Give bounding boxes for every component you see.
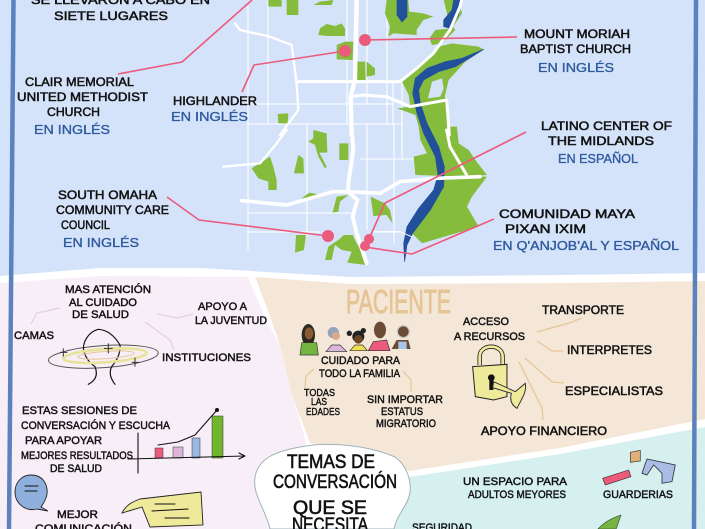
label: Highlander: EN INGLÉS [171, 109, 248, 124]
label: Clair Memorial [17, 75, 149, 137]
text: cuidado familia [304, 355, 443, 430]
vertical border: left [9, 0, 14, 529]
map: parks west and center [268, 0, 433, 123]
pointer: Latino Center [364, 132, 526, 244]
icon: family [300, 322, 411, 355]
callout: siete lugares: SIETE LUGARES [54, 9, 168, 23]
pointer: Highlander [242, 45, 351, 92]
map: parks south [252, 130, 393, 265]
labels: recursos: APOYO FINANCIERO [481, 424, 607, 438]
labels: galaxy topics [14, 283, 267, 364]
label: South Omaha: EN INGLÉS [63, 235, 139, 250]
labels: galaxy topics: CAMAS [14, 330, 54, 342]
label: Highlander: HIGHLANDER [173, 94, 257, 108]
label: Comunidad Maya: EN Q'ANJOB'AL Y ESPAÑOL [493, 239, 679, 253]
pointers: galaxy topics [31, 308, 193, 350]
icon: blue speech bubble [15, 475, 48, 511]
bubble: temas de conversación: QUE SE [293, 498, 367, 519]
label: Latino Center [541, 119, 672, 166]
labels: recursos: A RECURSOS [454, 331, 525, 343]
text: cuidado familia: ESTATUS [381, 406, 423, 418]
icon: head with galaxy [48, 329, 159, 384]
text: cuidado familia: SIN IMPORTAR [367, 394, 443, 406]
text: espacio adultos mayores [463, 476, 568, 501]
text: sesiones de conversación: DE SALUD [50, 463, 102, 475]
label: Mount Moriah: MOUNT MORIAH [524, 27, 630, 41]
pointers: recursos [519, 318, 582, 420]
text: cuidado familia: TODO LA FAMILIA [319, 368, 401, 380]
icon: yellow speech bubble [122, 492, 203, 527]
labels: recursos [454, 303, 663, 438]
labels: galaxy topics: INSTITUCIONES [162, 352, 251, 364]
panel: community voices [0, 276, 306, 529]
label: Latino Center: EN ESPAÑOL [558, 152, 638, 166]
label: Comunidad Maya: COMUNIDAD MAYA [499, 207, 635, 221]
icon: lock and key [473, 347, 526, 408]
label: Mount Moriah [520, 27, 631, 75]
icon: girl [347, 328, 367, 351]
label: Comunidad Maya: PIXAN IXIM [505, 222, 586, 236]
text: cuidado familia: CUIDADO PARA [321, 355, 401, 367]
icon: toy blocks [603, 450, 675, 485]
label: Mount Moriah: EN INGLÉS [538, 60, 614, 75]
text: espacio adultos mayores: ADULTOS MEYORES [468, 489, 566, 501]
label: South Omaha: COUNCIL [61, 218, 110, 232]
labels: recursos: TRANSPORTE [542, 303, 624, 317]
text: cuidado familia: EDADES [306, 407, 340, 418]
map: river [397, 0, 484, 262]
map: main roads south [223, 130, 480, 263]
labels: recursos: ACCESO [463, 316, 509, 328]
bubble: temas de conversación: TEMAS DE [287, 452, 375, 473]
bubble: temas de conversación [255, 444, 410, 529]
callout: siete lugares [31, 0, 210, 23]
label: Latino Center: THE MIDLANDS [548, 134, 654, 148]
icon: man [368, 322, 390, 351]
label: Clair Memorial: EN INGLÉS [34, 122, 110, 137]
icon: older woman [326, 327, 347, 352]
labels: galaxy topics: MAS ATENCIÓN [65, 283, 151, 296]
map: thin street grid [248, 0, 414, 250]
panel: map background [0, 0, 705, 277]
text: espacio adultos mayores: UN ESPACIO PARA [463, 476, 568, 488]
icon: woman [300, 324, 318, 355]
pointers: family [305, 369, 411, 392]
text: cuidado familia: TODAS [304, 388, 335, 399]
vertical border: right [694, 0, 696, 529]
labels: galaxy topics: LA JUVENTUD [195, 315, 267, 327]
text: mejor comunicación: MEJOR [57, 509, 98, 521]
text: sesiones de conversación: CONVERSACIÓN Y ESCUCHA [21, 419, 171, 432]
bar chart [128, 408, 245, 473]
label: South Omaha: COMMUNITY CARE [56, 203, 169, 217]
text: cuidado familia: LAS [311, 397, 327, 408]
label: South Omaha: SOUTH OMAHA [58, 188, 157, 202]
label: South Omaha [56, 188, 169, 250]
map: main roads north [235, 0, 462, 135]
label: Mount Moriah: BAPTIST CHURCH [520, 42, 631, 56]
label: Clair Memorial: CLAIR MEMORIAL [25, 75, 134, 89]
label: Latino Center: LATINO CENTER OF [541, 119, 672, 133]
labels: galaxy topics: DE SALUD [72, 309, 129, 321]
pointer: Comunidad Maya [360, 219, 494, 254]
label: Highlander [171, 94, 257, 124]
map: parks along river [397, 0, 487, 243]
panel: patient [255, 277, 705, 471]
labels: recursos: ESPECIALISTAS [565, 384, 663, 398]
labels: recursos: INTERPRETES [567, 343, 652, 357]
labels: galaxy topics: AL CUIDADO [69, 297, 137, 309]
text: sesiones de conversación [21, 405, 171, 475]
icon: older man [392, 326, 411, 349]
heading: paciente: PACIENTE [346, 283, 451, 320]
labels: galaxy topics: APOYO A [198, 301, 248, 313]
map [223, 0, 487, 265]
pointer: Clair Memorial [118, 0, 252, 74]
pointer: Mount Moriah [359, 34, 517, 46]
text: sesiones de conversación: PARA APOYAR [25, 435, 102, 447]
bubble: temas de conversación: CONVERSACIÓN [273, 471, 397, 493]
pointer: South Omaha [167, 197, 334, 242]
text: cuidado familia: MIGRATORIO [376, 418, 436, 430]
panel: community spaces [270, 427, 705, 529]
label: Clair Memorial: CHURCH [47, 105, 100, 119]
text: sesiones de conversación: ESTAS SESIONES DE [22, 405, 137, 417]
label: guarderias: GUARDERIAS [603, 489, 673, 501]
text: sesiones de conversación: MEJORES RESULTADOS [21, 450, 133, 462]
label: Comunidad Maya [493, 207, 679, 253]
text: mejor comunicación [35, 509, 132, 529]
icon: leaf [598, 515, 621, 529]
label: Clair Memorial: UNITED METHODIST [17, 90, 149, 104]
